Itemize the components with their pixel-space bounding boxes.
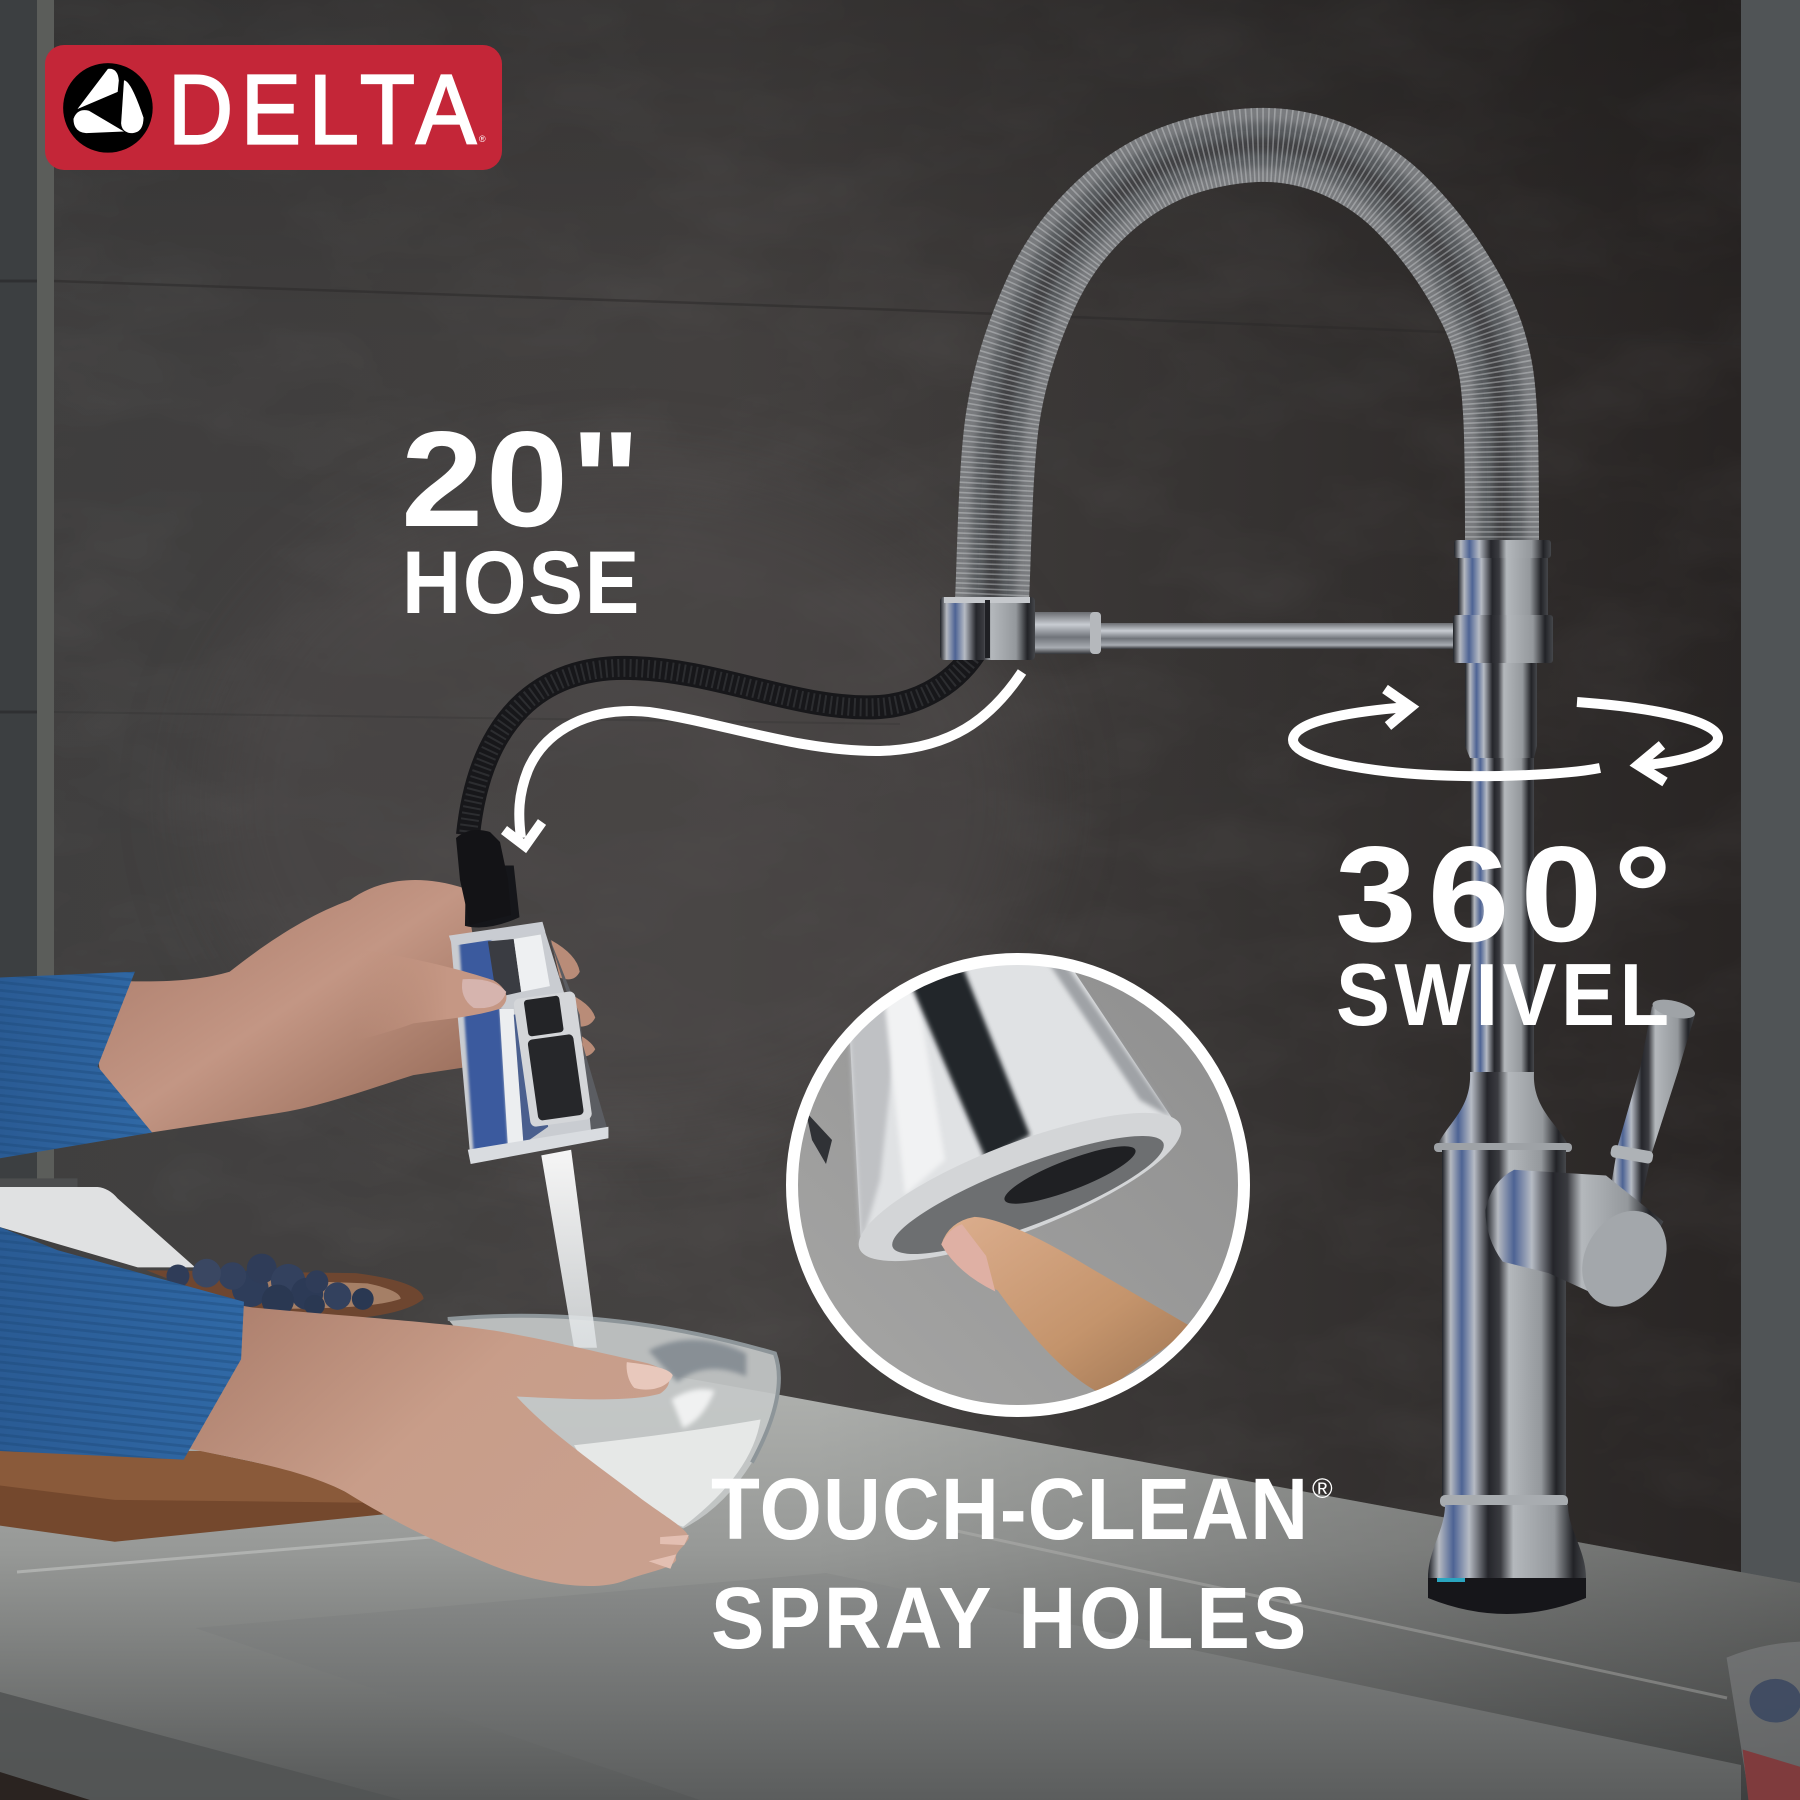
spray head close-up — [848, 965, 1182, 1262]
left wall strip — [0, 0, 54, 1200]
pull-down black hose — [456, 652, 975, 925]
logo wordmark: DELTA — [168, 55, 476, 164]
counter top — [0, 1345, 1800, 1800]
blueberry bowl — [146, 1254, 424, 1320]
heading: touch-clean spray holes: SPRAY HOLES — [711, 1569, 1306, 1667]
heading: 20 inch hose — [401, 404, 641, 633]
faucet: spring arch — [992, 145, 1502, 600]
logo: Delta: ® — [479, 134, 486, 144]
cup at bottom right — [1727, 1642, 1800, 1800]
heading: 20 inch hose: HOSE — [402, 534, 639, 633]
lower hand — [172, 1302, 689, 1586]
arrow: hose extension — [504, 672, 1022, 846]
logo: Delta — [45, 45, 502, 170]
sink basin — [0, 1573, 1741, 1800]
faucet: handle and lever — [1485, 996, 1697, 1322]
glass bowl — [448, 1316, 779, 1529]
heading: touch-clean spray holes — [711, 1460, 1333, 1667]
fingertip — [941, 1217, 1193, 1394]
spray head — [449, 866, 608, 1164]
heading: 20 inch hose: 20" — [401, 404, 641, 556]
inset circle: touch-clean spray holes — [792, 950, 1244, 1411]
arrow: swivel rotation — [1293, 689, 1718, 782]
icon: delta triangle mark — [63, 63, 153, 153]
right wall strip — [1741, 0, 1800, 1600]
upper hand — [97, 880, 476, 1135]
water stream — [541, 1150, 597, 1348]
white appliance — [0, 1178, 195, 1267]
thumb — [356, 949, 506, 1041]
faucet: column — [1428, 540, 1586, 1614]
faucet base — [1428, 1578, 1586, 1614]
faucet: shower arm and bracket — [940, 597, 1476, 660]
heading: 360 degree swivel: SWIVEL — [1336, 945, 1669, 1044]
fingers behind spray head — [551, 940, 595, 1056]
heading: 360 degree swivel — [1335, 818, 1672, 1044]
heading: 360 degree swivel: 360° — [1335, 818, 1672, 970]
cutting board — [0, 1451, 385, 1542]
upper sleeve — [0, 972, 152, 1158]
heading: touch-clean spray holes: TOUCH-CLEAN — [711, 1460, 1308, 1558]
lower sleeve — [0, 1227, 244, 1460]
heading: touch-clean spray holes: ® — [1312, 1473, 1333, 1504]
left side props in zoom coordinates — [0, 866, 779, 1586]
